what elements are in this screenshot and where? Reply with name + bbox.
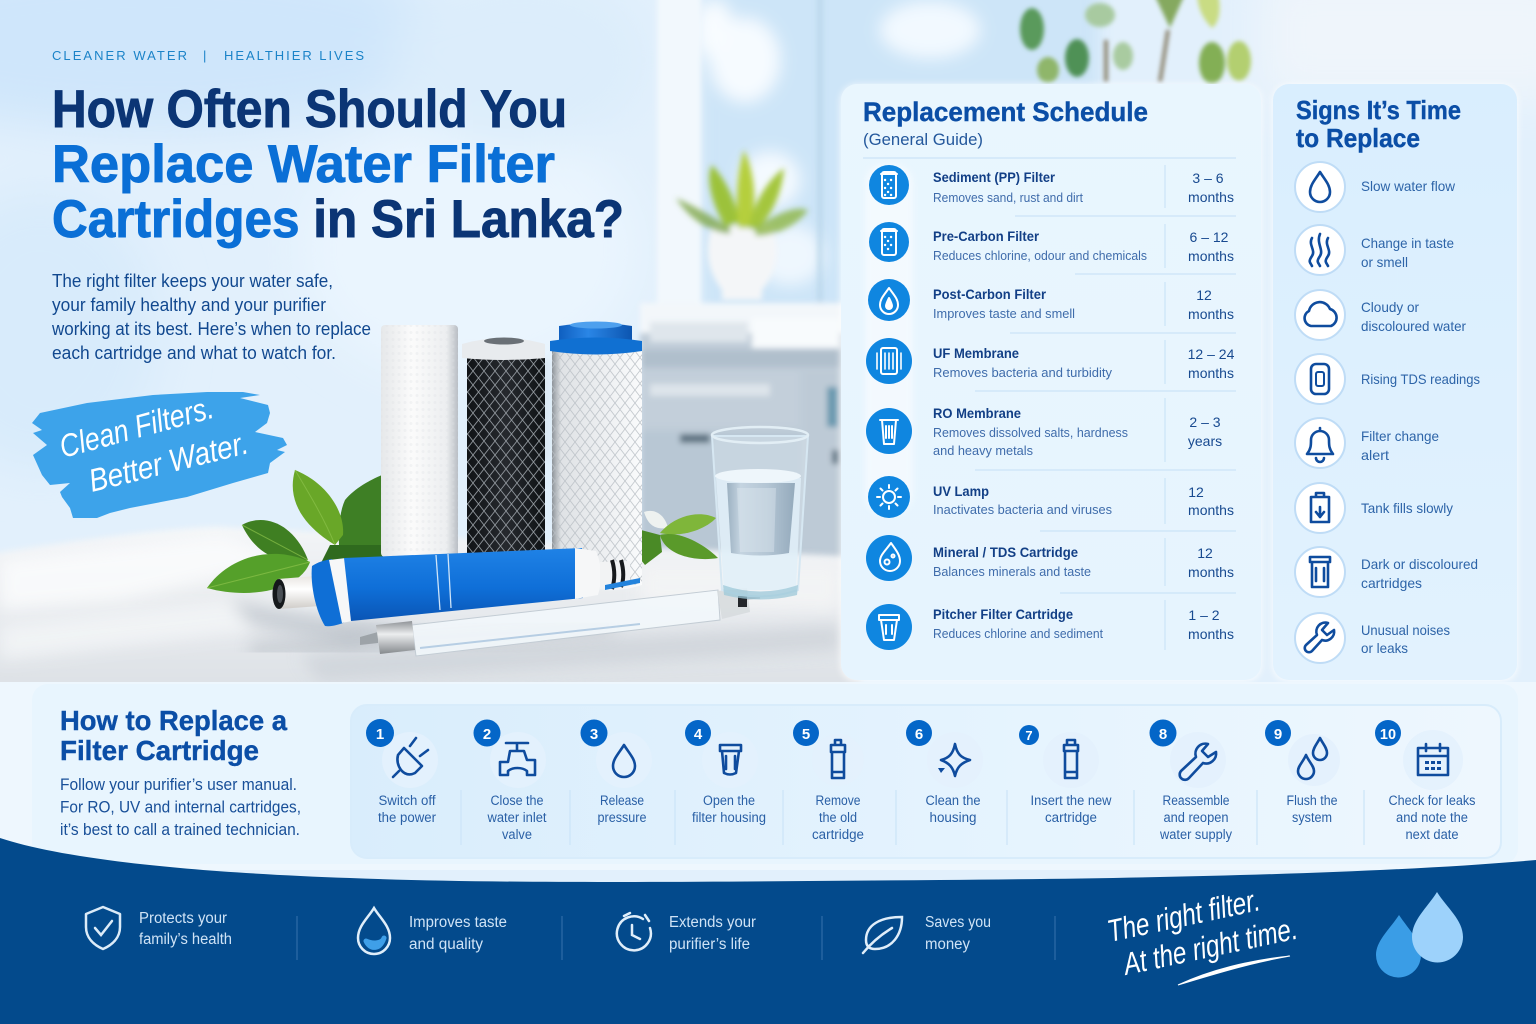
lower band background	[0, 682, 1536, 870]
row: RO membrane: and heavy metals	[933, 443, 1033, 458]
row: UV lamp: UV Lamp	[933, 483, 989, 499]
sign: rising TDS readings: Rising TDS readings	[1361, 371, 1480, 387]
step 1: switch off the power: 1	[376, 726, 384, 743]
step 2: close the water inlet valve: 2	[483, 726, 491, 743]
row: pitcher filter cartridge: Pitcher Filter Cartridge	[933, 606, 1073, 622]
step 8: reassemble and reopen water supply: water supply	[1159, 827, 1232, 842]
intro text: follow the user manual	[60, 775, 301, 839]
sign: slow water flow: Slow water flow	[1361, 178, 1456, 194]
eyebrow: cleaner water healthier lives: HEALTHIER LIVES	[224, 48, 364, 63]
sign: dark or discoloured cartridges	[1295, 547, 1478, 597]
intro paragraph: each cartridge and what to watch for.	[52, 343, 336, 363]
heading: how to replace a filter cartridge: Filter Cartridge	[60, 735, 259, 766]
row: sediment filter	[869, 165, 1234, 205]
row: mineral TDS cartridge: 12	[1197, 545, 1213, 561]
benefit: extends purifier's life: purifier’s life	[669, 936, 750, 953]
step 10: check for leaks and note the next date: Check for leaks	[1388, 793, 1476, 808]
handwritten tagline: At the right time.	[1119, 911, 1301, 982]
sign: unusual noises or leaks	[1295, 613, 1450, 663]
sign: change in taste or smell: or smell	[1361, 254, 1408, 270]
step 5: remove the old cartridge: cartridge	[812, 827, 864, 842]
row: UF membrane: UF Membrane	[933, 345, 1019, 361]
sign: unusual noises or leaks: or leaks	[1361, 640, 1408, 656]
row: post-carbon filter: months	[1188, 306, 1234, 322]
step 2: close the water inlet valve: valve	[502, 827, 532, 842]
benefit: saves money: Saves you	[925, 914, 991, 931]
row: RO membrane: Removes dissolved salts, hardness	[933, 425, 1128, 440]
step 1: switch off the power	[366, 719, 438, 825]
row: UF membrane: months	[1188, 365, 1234, 381]
row: mineral TDS cartridge: Balances minerals and taste	[933, 564, 1091, 579]
step 4: open the filter housing: Open the	[703, 793, 755, 808]
row: mineral TDS cartridge: Mineral / TDS Cartridge	[933, 544, 1078, 560]
title: Cartridges in Sri Lanka?	[52, 190, 624, 249]
photo: mesh cartridge with blue cap	[550, 322, 642, 590]
row: RO membrane: RO Membrane	[933, 405, 1021, 421]
step 6: clean the housing: Clean the	[926, 793, 980, 808]
photo: leaves behind cartridges	[207, 470, 718, 593]
row: pitcher filter cartridge: 1 – 2	[1188, 607, 1220, 623]
row: mineral TDS cartridge	[866, 535, 1234, 581]
brush callout: clean filters better water: Clean Filters.	[55, 389, 217, 465]
step 5: remove the old cartridge: 5	[802, 726, 810, 743]
row: UF membrane: Removes bacteria and turbidity	[933, 365, 1112, 380]
step 10: check for leaks and note the next date	[1375, 720, 1476, 842]
intro text: follow the user manual: Follow your purifier’s user manual.	[60, 775, 297, 794]
panel: replacement schedule	[841, 84, 1261, 680]
sign: unusual noises or leaks: Unusual noises	[1361, 622, 1450, 638]
row: pitcher filter cartridge: Reduces chlorine and sediment	[933, 626, 1103, 641]
intro paragraph: working at its best. Here’s when to replace	[51, 319, 371, 339]
row: RO membrane	[866, 405, 1222, 458]
step 9: flush the system: Flush the	[1286, 793, 1338, 808]
row: pre-carbon filter: months	[1188, 248, 1234, 264]
step 7: insert the new cartridge	[1019, 725, 1112, 825]
heading: signs it's time to replace	[1296, 95, 1461, 153]
step 3: release pressure	[580, 720, 652, 825]
step 8: reassemble and reopen water supply: 8	[1159, 726, 1167, 743]
step 3: release pressure: pressure	[598, 810, 646, 825]
step 3: release pressure: 3	[590, 726, 598, 743]
sign: change in taste or smell: Change in taste	[1361, 235, 1454, 251]
row: UV lamp: 12	[1188, 484, 1204, 500]
row: UV lamp: Inactivates bacteria and viruses	[933, 502, 1112, 517]
benefit: improves taste and quality: Improves taste	[409, 914, 507, 931]
brush callout: clean filters better water: Better Water.	[85, 424, 252, 499]
row: UF membrane	[866, 338, 1235, 384]
step 9: flush the system	[1265, 720, 1340, 825]
step 10: check for leaks and note the next date: 10	[1380, 727, 1396, 743]
benefit: protects family's health	[86, 907, 232, 949]
intro text: follow the user manual: it’s best to call a trained technician.	[60, 820, 300, 839]
row: pre-carbon filter	[869, 222, 1234, 264]
title: How Often Should You	[52, 80, 567, 139]
intro paragraph	[51, 271, 371, 363]
step 8: reassemble and reopen water supply: Reassemble	[1162, 793, 1230, 808]
sign: tank fills slowly: Tank fills slowly	[1361, 500, 1453, 516]
benefit: improves taste and quality	[358, 908, 507, 954]
brush callout: clean filters better water	[32, 389, 287, 518]
sign: filter change alert	[1295, 418, 1439, 468]
icon: water drops	[1376, 892, 1463, 978]
panel: signs it's time to replace	[1273, 84, 1517, 680]
step 2: close the water inlet valve: water inlet	[487, 810, 547, 825]
handwritten tagline	[1104, 882, 1301, 985]
sign: dark or discoloured cartridges: Dark or discoloured	[1361, 556, 1478, 572]
step 4: open the filter housing: 4	[694, 726, 703, 743]
eyebrow: cleaner water healthier lives	[52, 48, 364, 63]
benefit: extends purifier's life	[617, 913, 756, 953]
row: post-carbon filter: Improves taste and smell	[933, 306, 1075, 321]
step 6: clean the housing	[906, 720, 983, 825]
step 7: insert the new cartridge: 7	[1025, 728, 1033, 743]
step 1: switch off the power: the power	[378, 810, 436, 825]
benefit: extends purifier's life: Extends your	[669, 914, 756, 931]
step 2: close the water inlet valve	[474, 720, 547, 842]
panel: how to replace intro	[32, 684, 1518, 864]
step 10: check for leaks and note the next date: next date	[1406, 827, 1458, 842]
eyebrow: cleaner water healthier lives: CLEANER WATER	[52, 48, 187, 63]
row: UF membrane: 12 – 24	[1188, 346, 1235, 362]
row: UV lamp: months	[1188, 502, 1234, 518]
heading: signs it's time to replace: to Replace	[1296, 123, 1420, 153]
row: RO membrane: years	[1188, 433, 1222, 449]
sign: filter change alert: Filter change	[1361, 428, 1439, 444]
panel: replacement steps	[351, 705, 1501, 858]
eyebrow: cleaner water healthier lives: |	[203, 48, 206, 63]
footer wave band	[0, 838, 1536, 1024]
benefit: protects family's health: Protects your	[139, 910, 227, 927]
row: pre-carbon filter: Pre-Carbon Filter	[933, 228, 1040, 244]
heading: replacement schedule	[863, 97, 1148, 149]
row: sediment filter: Sediment (PP) Filter	[933, 169, 1055, 185]
row: pre-carbon filter: 6 – 12	[1190, 229, 1229, 245]
row: mineral TDS cartridge: months	[1188, 564, 1234, 580]
benefit: protects family's health: family’s health	[139, 931, 232, 948]
benefit: improves taste and quality: and quality	[409, 936, 483, 953]
step 7: insert the new cartridge: cartridge	[1045, 810, 1097, 825]
title: Replace Water Filter	[52, 135, 555, 194]
photo: UV lamp	[360, 588, 760, 656]
heading: how to replace a filter cartridge: How to Replace a	[60, 705, 287, 736]
sign: cloudy or discoloured water: Cloudy or	[1361, 299, 1419, 315]
sign: rising TDS readings	[1295, 354, 1480, 404]
photo: black carbon cartridge	[462, 338, 545, 555]
row: post-carbon filter	[868, 279, 1234, 322]
step 9: flush the system: 9	[1274, 726, 1282, 743]
heading: how to replace a filter cartridge	[60, 705, 287, 766]
intro paragraph: The right filter keeps your water safe,	[52, 271, 333, 291]
sign: cloudy or discoloured water	[1295, 290, 1466, 340]
row: sediment filter: months	[1188, 189, 1234, 205]
row: sediment filter: 3 – 6	[1192, 170, 1224, 186]
sign: cloudy or discoloured water: discoloured water	[1361, 318, 1466, 334]
sign: slow water flow	[1295, 162, 1456, 212]
title	[52, 80, 624, 249]
step 7: insert the new cartridge: Insert the new	[1030, 793, 1112, 808]
sign: tank fills slowly	[1295, 483, 1453, 533]
step 4: open the filter housing: filter housing	[692, 810, 766, 825]
row: UV lamp	[868, 476, 1234, 518]
photo: glass of water	[712, 427, 808, 600]
step 2: close the water inlet valve: Close the	[490, 793, 544, 808]
photo: white sediment cartridge	[381, 325, 458, 557]
benefit: saves money: money	[925, 936, 970, 953]
row: pre-carbon filter: Reduces chlorine, odour and chemicals	[933, 248, 1147, 263]
step 5: remove the old cartridge: the old	[819, 810, 857, 825]
step 5: remove the old cartridge: Remove	[816, 793, 860, 808]
heading: signs it's time to replace: Signs It’s Time	[1296, 95, 1461, 125]
sign: filter change alert: alert	[1361, 447, 1389, 463]
step 8: reassemble and reopen water supply	[1150, 720, 1232, 842]
handwritten tagline: The right filter.	[1104, 882, 1263, 949]
sign: change in taste or smell	[1295, 225, 1454, 275]
row: RO membrane: 2 – 3	[1189, 414, 1221, 430]
step 6: clean the housing: 6	[915, 726, 923, 743]
row: pitcher filter cartridge: months	[1188, 626, 1234, 642]
photo: blue RO membrane	[250, 548, 640, 650]
benefit: saves money	[863, 914, 991, 953]
sign: dark or discoloured cartridges: cartridges	[1361, 575, 1422, 591]
heading: replacement schedule: (General Guide)	[863, 130, 983, 149]
step 10: check for leaks and note the next date: and note the	[1396, 810, 1468, 825]
row: post-carbon filter: Post-Carbon Filter	[933, 286, 1047, 302]
step 8: reassemble and reopen water supply: and reopen	[1164, 810, 1228, 825]
heading: replacement schedule: Replacement Schedule	[863, 97, 1148, 127]
row: sediment filter: Removes sand, rust and dirt	[933, 190, 1083, 205]
step 5: remove the old cartridge	[793, 720, 864, 842]
row: post-carbon filter: 12	[1196, 287, 1212, 303]
step 9: flush the system: system	[1292, 810, 1332, 825]
row: pitcher filter cartridge	[866, 604, 1234, 650]
intro text: follow the user manual: For RO, UV and internal cartridges,	[60, 798, 301, 816]
step 3: release pressure: Release	[600, 793, 644, 808]
step 4: open the filter housing	[685, 720, 766, 825]
intro paragraph: your family healthy and your purifier	[52, 295, 326, 315]
step 6: clean the housing: housing	[930, 810, 976, 825]
step 1: switch off the power: Switch off	[378, 793, 436, 808]
